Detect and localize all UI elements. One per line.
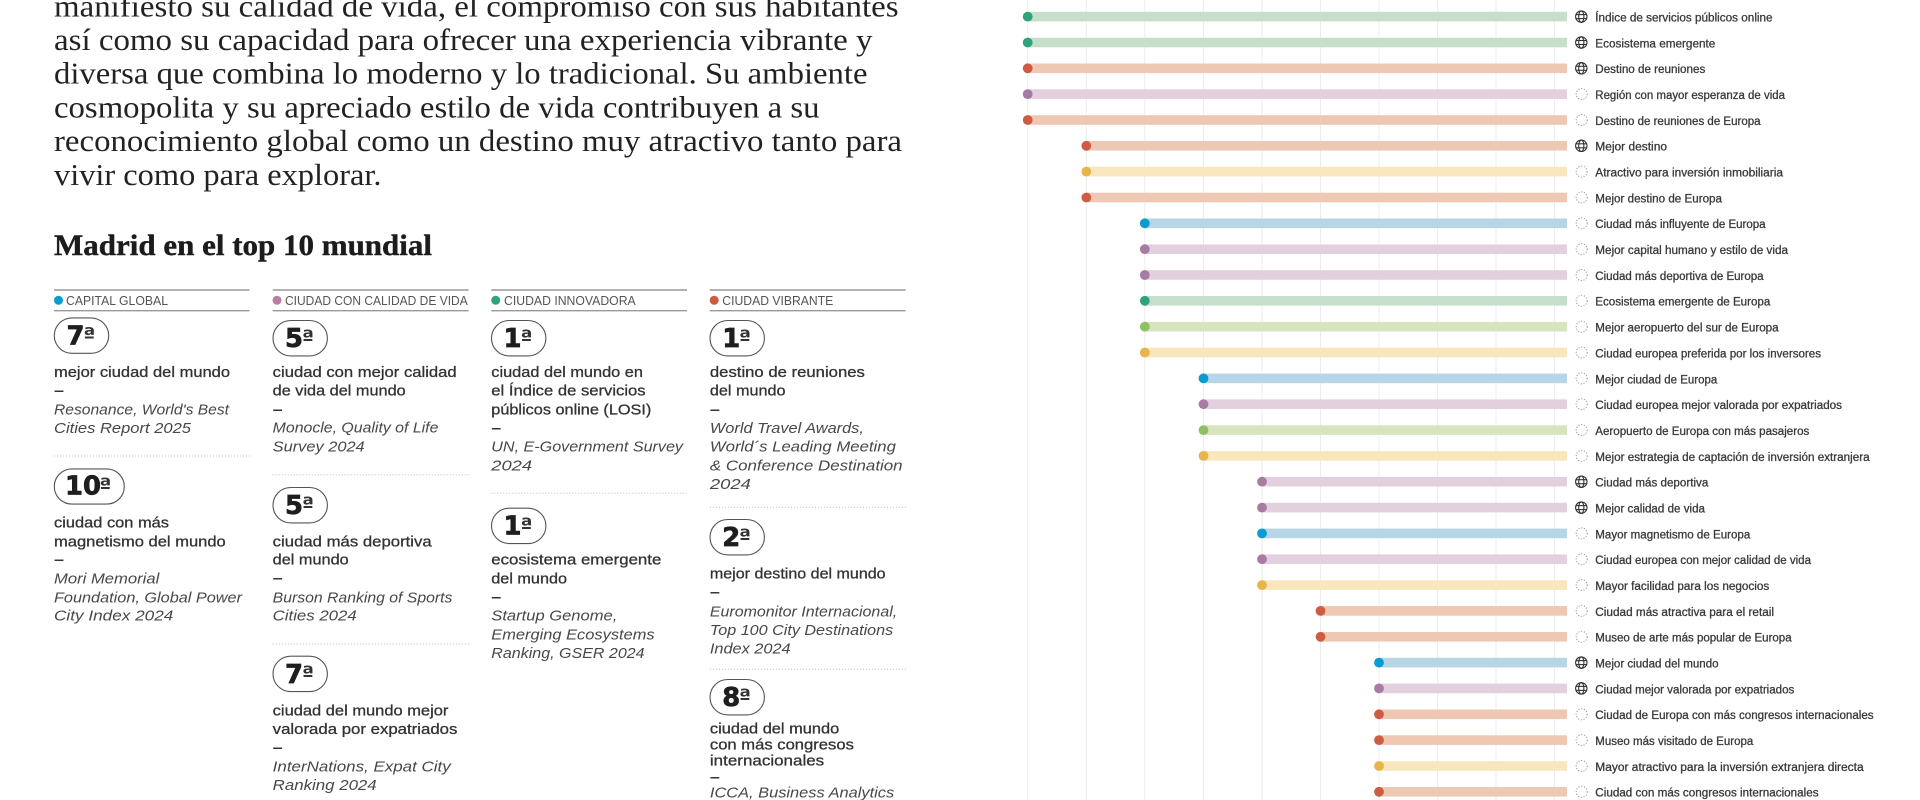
row: Ciudad más deportiva (1257, 476, 1709, 490)
ranking text: ecosistema emergente: del mundo (491, 570, 567, 587)
badge: 10ª: ª (99, 473, 112, 497)
row: Ciudad europea preferida por los inversores (1140, 347, 1821, 360)
ranking text: mejor destino del mundo: – (710, 584, 720, 601)
badge: 1ª ecosistema: ª (520, 513, 533, 537)
badge: 7ª: 7 (66, 321, 84, 351)
row: Índice de servicios públicos online (1023, 11, 1773, 24)
row: Ciudad de Europa con más congresos internacionales: Ciudad de Europa con más congresos internacionales (1595, 710, 1874, 722)
ranking text: mejor destino del mundo: mejor destino del mundo (710, 566, 886, 583)
row: Mejor ciudad del mundo (1374, 657, 1719, 670)
ranking text: destino de reuniones: – (710, 402, 720, 418)
text block: intro paragraph: reconocimiento global como un destino muy atractivo tanto para (54, 123, 902, 158)
ranking text: ciudad con mejor calidad: ciudad con mejor calidad (273, 364, 457, 381)
ranking text: ciudad más deportiva: Burson Ranking of Sports (273, 589, 453, 606)
row: Ciudad europea mejor valorada por expatriados: Ciudad europea mejor valorada por expatriados (1595, 400, 1842, 412)
ranking text: ciudad con mejor calidad: Survey 2024 (273, 439, 365, 456)
panel: ciudad innovadora (490, 290, 687, 662)
ranking text: destino de reuniones: destino de reuniones (710, 364, 865, 381)
ranking text: mejor ciudad del mundo: – (54, 382, 64, 400)
ranking text: ciudad con mejor calidad (273, 364, 457, 456)
row: Museo de arte más popular de Europa: Museo de arte más popular de Europa (1595, 633, 1792, 645)
badge: 5ª: ª (302, 326, 314, 350)
badge: 7ª (54, 318, 109, 353)
ranking text: índice de servicios públicos online: el Índice de servicios (491, 383, 646, 400)
row: Mejor estrategia de captación de inversión extranjera: Mejor estrategia de captación de inversión extranjera (1595, 452, 1870, 464)
ranking text: ecosistema emergente (491, 552, 661, 662)
row: Mejor destino (1081, 140, 1667, 154)
ranking text: ciudad más deportiva: del mundo (273, 552, 349, 569)
badge: 7ª: ª (83, 323, 96, 347)
row: Ecosistema emergente (1023, 37, 1715, 50)
ranking text: ciudad con más magnetismo: Foundation, Global Power (54, 589, 243, 606)
row: Ciudad más deportiva de Europa (1140, 270, 1764, 283)
row: Ciudad con más congresos internacionales (1374, 786, 1819, 800)
row: Ciudad de Europa con más congresos internacionales (1374, 709, 1874, 722)
row: Mayor atractivo para la inversión extranjera directa (1374, 760, 1864, 774)
ranking text: ciudad con más magnetismo: ciudad con más (54, 515, 169, 532)
row: Destino de reuniones: Destino de reuniones (1595, 64, 1706, 76)
row: Atractivo para inversión inmobiliaria (1081, 166, 1784, 180)
row: Mejor destino de Europa (1081, 192, 1723, 205)
ranking text: ciudad mejor valorada por expatriados: – (273, 740, 283, 756)
badge: 1ª reuniones: ª (739, 326, 751, 350)
text block: intro paragraph: vivir como para explorar. (54, 157, 382, 192)
badge: 2ª: ª (739, 525, 751, 549)
badge: 10ª (54, 469, 124, 504)
ranking text: destino de reuniones: World´s Leading Meeting (710, 439, 897, 456)
ranking text: índice de servicios públicos online: públicos online (LOSI) (491, 401, 651, 418)
row: Ciudad más atractiva para el retail (1316, 605, 1774, 619)
badge: 5ª deportiva: 5 (285, 491, 303, 521)
ranking text: ciudad mejor valorada por expatriados: ciudad del mundo mejor (273, 703, 448, 720)
ranking text: ciudad más deportiva: Cities 2024 (273, 607, 357, 624)
ranking text: destino de reuniones: del mundo (710, 383, 786, 400)
ranking text: índice de servicios públicos online (490, 364, 685, 474)
row: Destino de reuniones (1023, 63, 1706, 76)
row: Destino de reuniones de Europa (1023, 114, 1761, 128)
ranking text: destino de reuniones (709, 364, 903, 493)
row: Mejor ciudad de Europa (1199, 373, 1718, 386)
text block: intro paragraph: diversa que combina lo moderno y lo tradicional. Su ambiente (54, 56, 867, 91)
row: Mejor aeropuerto del sur de Europa: Mejor aeropuerto del sur de Europa (1595, 323, 1779, 335)
ranking text: mejor ciudad del mundo: Cities Report 2025 (54, 420, 192, 437)
badge: 8ª (710, 680, 764, 715)
row: Ciudad más influyente de Europa (1140, 218, 1766, 231)
row: Ciudad más atractiva para el retail: Ciudad más atractiva para el retail (1595, 607, 1774, 619)
row: Ciudad más deportiva de Europa: Ciudad más deportiva de Europa (1595, 271, 1764, 283)
badge: 2ª: 2 (722, 523, 740, 553)
ranking text: ecosistema emergente: – (491, 589, 501, 606)
row: Mejor capital humano y estilo de vida: Mejor capital humano y estilo de vida (1595, 245, 1789, 257)
heading: Madrid en el top 10 mundial: Madrid en el top 10 mundial (54, 229, 432, 262)
ranking text: ciudad más deportiva: ciudad más deportiva (273, 534, 432, 551)
ranking text: ciudad mejor valorada por expatriados: valorada por expatriados (273, 721, 457, 738)
row: Mejor estrategia de captación de inversión extranjera (1199, 450, 1870, 464)
badge: 7ª expatriados: ª (302, 662, 314, 686)
row: Ciudad europea con mejor calidad de vida: Ciudad europea con mejor calidad de vida (1595, 555, 1812, 567)
ranking text: ciudad con más congresos internacionales: – (710, 769, 720, 786)
ranking text: mejor destino del mundo: Euromonitor Internacional, (710, 603, 897, 620)
badge: 5ª deportiva: ª (302, 493, 314, 517)
ranking text: ciudad con mejor calidad: de vida del mundo (273, 383, 406, 400)
badge: 1ª LOSI: 1 (504, 324, 522, 354)
ranking text: ciudad con más congresos internacionales: con más congresos (710, 737, 854, 754)
ranking text: mejor destino del mundo (710, 566, 897, 658)
ranking text: mejor ciudad del mundo (54, 364, 230, 437)
row: Ciudad mejor valorada por expatriados: Ciudad mejor valorada por expatriados (1595, 684, 1795, 696)
ranking text: ciudad mejor valorada por expatriados: InterNations, Expat City (273, 759, 452, 776)
category: capital global: CAPITAL GLOBAL (66, 293, 168, 308)
ranking text: ecosistema emergente: Startup Genome, (491, 607, 617, 624)
chart: rankings timeline (1023, 0, 1874, 800)
category: ciudad con calidad de vida: CIUDAD CON CALIDAD DE VIDA (285, 293, 468, 308)
ranking text: ciudad con más magnetismo: – (54, 552, 64, 568)
panel: capital global (54, 290, 250, 624)
row: Ciudad europea mejor valorada por expatriados (1199, 399, 1842, 412)
badge: 8ª: 8 (722, 683, 740, 713)
ranking text: índice de servicios públicos online: – (491, 420, 501, 437)
text block: intro paragraph (54, 0, 902, 192)
row: Mejor destino de Europa: Mejor destino de Europa (1595, 193, 1723, 205)
row: Mayor facilidad para los negocios: Mayor facilidad para los negocios (1595, 581, 1770, 593)
row: Destino de reuniones de Europa: Destino de reuniones de Europa (1595, 116, 1761, 128)
row: Ecosistema emergente: Ecosistema emergente (1595, 38, 1715, 50)
row: Museo de arte más popular de Europa (1316, 631, 1792, 645)
badge: 1ª LOSI (492, 320, 546, 356)
row: Mayor magnetismo de Europa: Mayor magnetismo de Europa (1595, 529, 1751, 541)
badge: 5ª: 5 (285, 324, 303, 354)
badge: 1ª reuniones (710, 320, 764, 356)
ranking text: índice de servicios públicos online: 2024 (490, 457, 532, 474)
badge: 2ª (710, 520, 764, 555)
category: ciudad innovadora: CIUDAD INNOVADORA (504, 293, 636, 308)
ranking text: índice de servicios públicos online: ciudad del mundo en (491, 364, 643, 381)
ranking text: ciudad más deportiva: – (273, 570, 283, 587)
badge: 1ª reuniones: 1 (722, 324, 740, 354)
row: Región con mayor esperanza de vida (1023, 89, 1786, 102)
ranking text: ciudad con más congresos internacionales (710, 721, 895, 800)
row: Museo más visitado de Europa (1374, 735, 1754, 748)
ranking text: ciudad con mejor calidad: Monocle, Quality of Life (273, 420, 438, 437)
badge: 1ª ecosistema: 1 (504, 512, 522, 542)
row: Mejor capital humano y estilo de vida (1140, 244, 1789, 257)
row: Ecosistema emergente de Europa (1140, 295, 1771, 309)
row: Mayor facilidad para los negocios (1257, 580, 1770, 593)
text block: intro paragraph: cosmopolita y su apreciado estilo de vida contribuyen a su (54, 89, 820, 124)
ranking text: ciudad mejor valorada por expatriados: Ranking 2024 (273, 777, 377, 794)
ranking text: ciudad con más magnetismo: Mori Memorial (54, 570, 160, 587)
ranking text: mejor ciudad del mundo: mejor ciudad del mundo (54, 364, 230, 381)
category: ciudad vibrante: CIUDAD VIBRANTE (722, 293, 834, 308)
badge: 7ª expatriados: 7 (285, 660, 303, 690)
row: Mejor ciudad de Europa: Mejor ciudad de Europa (1595, 374, 1718, 386)
ranking text: ecosistema emergente: Ranking, GSER 2024 (491, 645, 645, 662)
text block: intro paragraph: así como su capacidad para ofrecer una experiencia vibrante y (54, 22, 873, 57)
row: Ciudad mejor valorada por expatriados (1374, 683, 1795, 696)
ranking text: índice de servicios públicos online: UN, E-Government Survey (491, 439, 685, 456)
ranking text: ciudad con más magnetismo: magnetismo del mundo (54, 534, 226, 551)
row: Región con mayor esperanza de vida: Región con mayor esperanza de vida (1595, 90, 1786, 102)
badge: 1ª ecosistema (492, 508, 546, 544)
ranking text: mejor destino del mundo: Index 2024 (710, 641, 791, 658)
row: Mejor calidad de vida (1257, 502, 1706, 516)
row: Índice de servicios públicos online: Índice de servicios públicos online (1595, 12, 1773, 24)
ranking text: mejor ciudad del mundo: Resonance, World's Best (54, 401, 230, 418)
row: Mayor atractivo para la inversión extranjera directa: Mayor atractivo para la inversión extranjera directa (1595, 762, 1864, 774)
row: Mejor ciudad del mundo: Mejor ciudad del mundo (1595, 658, 1719, 670)
panel: ciudad vibrante (709, 290, 906, 800)
ranking text: ciudad con mejor calidad: – (273, 402, 283, 418)
row: Ciudad con más congresos internacionales: Ciudad con más congresos internacionales (1595, 788, 1819, 800)
badge: 5ª (273, 320, 327, 356)
row: Aeropuerto de Europa con más pasajeros (1199, 425, 1810, 438)
row: Aeropuerto de Europa con más pasajeros: Aeropuerto de Europa con más pasajeros (1595, 426, 1810, 438)
row: Mejor destino: Mejor destino (1595, 142, 1667, 154)
ranking text: ciudad más deportiva (273, 534, 453, 624)
row: Ciudad más influyente de Europa: Ciudad más influyente de Europa (1595, 219, 1766, 231)
row: Ecosistema emergente de Europa: Ecosistema emergente de Europa (1595, 297, 1771, 309)
row: Mejor aeropuerto del sur de Europa (1140, 321, 1779, 335)
row: Museo más visitado de Europa: Museo más visitado de Europa (1595, 736, 1754, 748)
badge: 1ª LOSI: ª (520, 326, 533, 350)
ranking text: ciudad mejor valorada por expatriados (273, 703, 457, 794)
badge: 10ª: 10 (65, 472, 101, 502)
ranking text: destino de reuniones: & Conference Destination (710, 457, 903, 474)
row: Atractivo para inversión inmobiliaria: Atractivo para inversión inmobiliaria (1595, 168, 1784, 180)
ranking text: mejor destino del mundo: Top 100 City Destinations (710, 622, 894, 639)
badge: 7ª expatriados (273, 656, 327, 692)
ranking text: ecosistema emergente: Emerging Ecosystems (491, 626, 655, 643)
panel: ciudad con calidad de vida (272, 290, 469, 794)
ranking text: ciudad con más magnetismo: City Index 2024 (54, 607, 173, 624)
badge: 5ª deportiva (273, 488, 327, 523)
row: Ciudad más deportiva: Ciudad más deportiva (1595, 478, 1709, 490)
ranking text: destino de reuniones: 2024 (709, 476, 751, 493)
ranking text: ciudad con más magnetismo (54, 515, 243, 624)
badge: 8ª: ª (739, 685, 751, 709)
row: Ciudad europea con mejor calidad de vida (1257, 554, 1812, 567)
row: Mayor magnetismo de Europa (1257, 528, 1751, 541)
ranking text: destino de reuniones: World Travel Awards, (710, 420, 864, 437)
ranking text: ciudad con más congresos internacionales: internacionales (710, 753, 824, 770)
ranking text: ecosistema emergente: ecosistema emergente (491, 552, 661, 569)
ranking text: ciudad con más congresos internacionales: ciudad del mundo (710, 721, 839, 738)
row: Ciudad europea preferida por los inversores: Ciudad europea preferida por los inversores (1595, 348, 1821, 360)
row: Mejor calidad de vida: Mejor calidad de vida (1595, 504, 1706, 516)
